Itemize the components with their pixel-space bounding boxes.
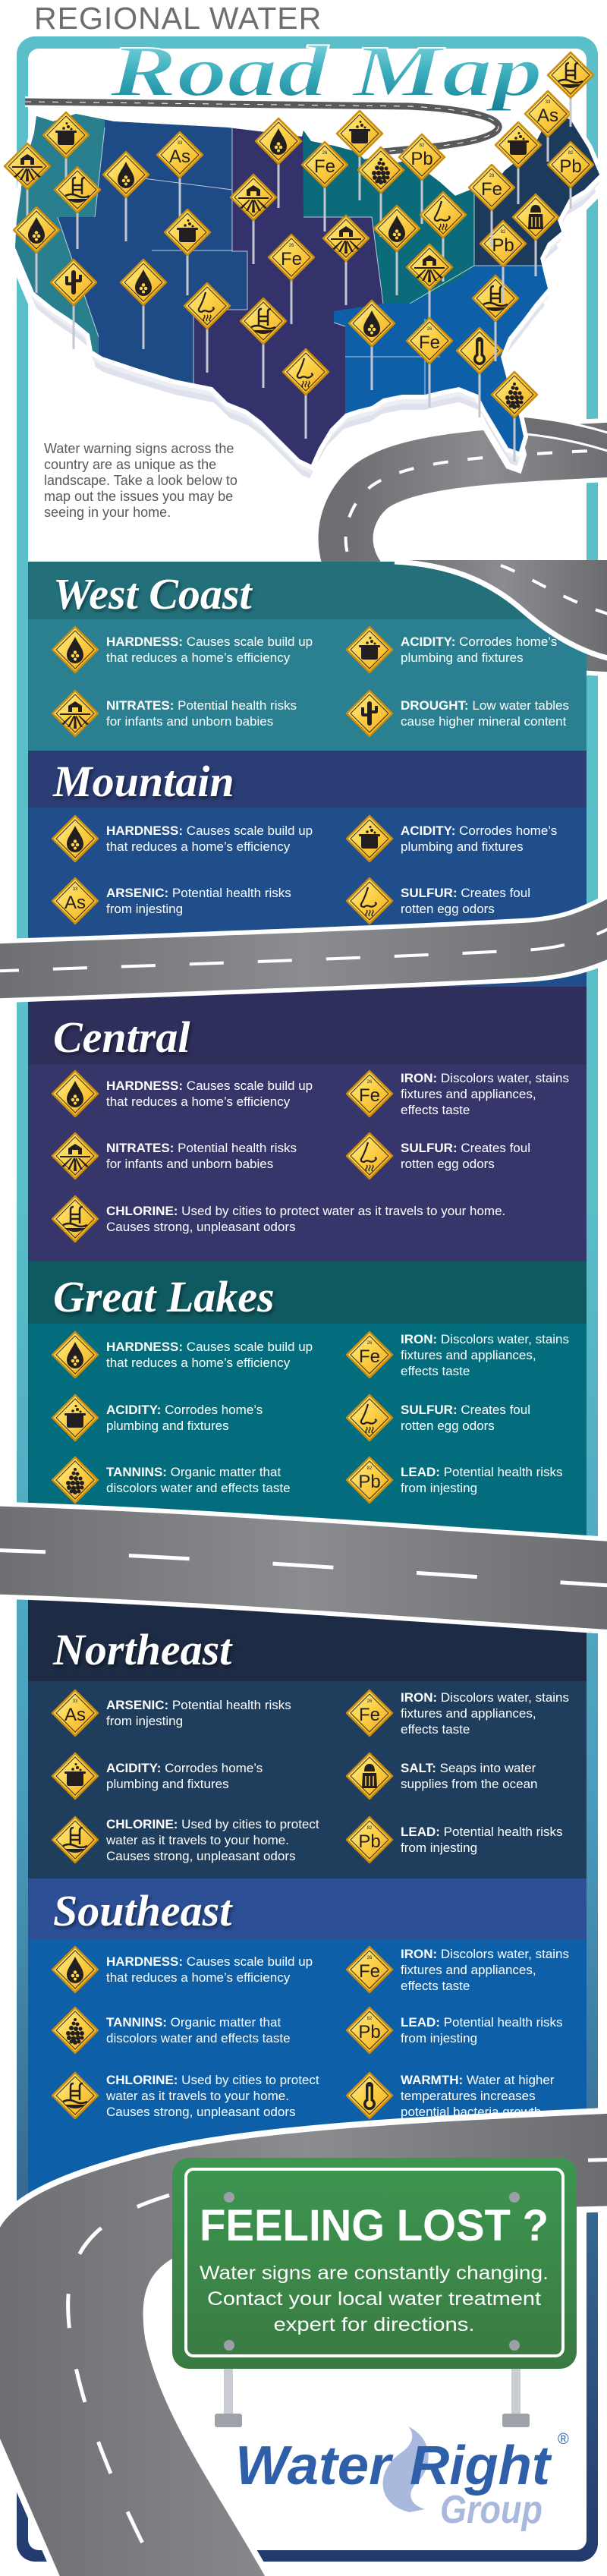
logo: water right group (235, 2426, 569, 2532)
item: tannins: discolors water and effects taste (106, 1481, 291, 1495)
item: tannins: TANNINS: Organic matter that (106, 2015, 281, 2030)
item: nitrates: for infants and unborn babies (106, 714, 273, 729)
item: chlorine: water as it travels to your home. (106, 2089, 289, 2102)
map signs: 26 (489, 174, 495, 178)
item: iron: 26 (367, 1699, 373, 1704)
item: drought: DROUGHT: Low water tables (401, 698, 569, 713)
item: chlorine (52, 1815, 319, 1864)
item: nitrates: NITRATES: Potential health risks (106, 698, 297, 713)
item: sulfur (346, 877, 530, 924)
item: iron: Fe (359, 1961, 380, 1982)
item: sulfur: rotten egg odors (401, 1419, 495, 1433)
map signs: 26 (322, 151, 328, 156)
item: nitrates (52, 1132, 297, 1179)
panel: northeast header (28, 1551, 587, 1681)
item: chlorine: Causes strong, unpleasant odors (106, 1849, 296, 1863)
road: corner over west coast (395, 560, 607, 659)
item: salt: supplies from the ocean (401, 1777, 537, 1791)
item: hardness: that reduces a home’s efficiency (106, 839, 290, 854)
item: warmth (346, 2072, 554, 2119)
item: lead: LEAD: Potential health risks (401, 2015, 563, 2030)
item: iron: IRON: Discolors water, stains (401, 1946, 569, 1961)
item: hardness: HARDNESS: Causes scale build up (106, 824, 313, 838)
item: lead: from injesting (401, 1841, 477, 1855)
item: iron: fixtures and appliances, (401, 1706, 536, 1720)
item: lead: LEAD: Potential health risks (401, 1825, 563, 1839)
item: acidity: plumbing and fixtures (401, 650, 524, 665)
item: hardness: that reduces a home’s efficiency (106, 1356, 290, 1370)
item: acidity (346, 625, 557, 674)
item: chlorine: CHLORINE: Used by cities to protect (106, 2072, 319, 2087)
item: hardness: HARDNESS: Causes scale build up (106, 1079, 313, 1093)
item: iron: fixtures and appliances, (401, 1348, 536, 1362)
item: acidity: ACIDITY: Corrodes home’s (106, 1761, 263, 1775)
item: iron: IRON: Discolors water, stains (401, 1331, 569, 1346)
callout: feeling lost sign: Contact your local water treatment (207, 2288, 541, 2310)
item: sulfur (346, 1132, 530, 1179)
road: great lakes to northeast (0, 1550, 607, 1586)
item: lead: Pb (358, 1472, 381, 1492)
item: drought: cause higher mineral content (401, 714, 566, 729)
item: iron: Fe (359, 1705, 380, 1725)
panel: mountain header: Mountain (53, 757, 234, 806)
item: chlorine (52, 2072, 319, 2119)
item: warmth: temperatures increases (401, 2089, 536, 2102)
map signs: Pb (559, 156, 582, 177)
item: hardness: HARDNESS: Causes scale build up (106, 635, 313, 649)
map signs: 33 (178, 141, 183, 146)
item: iron: Fe (359, 1346, 380, 1367)
item: iron: effects taste (401, 1978, 470, 1993)
logo: water right group: Group (440, 2488, 543, 2532)
item: hardness (52, 1331, 313, 1378)
item: sulfur (346, 1393, 530, 1442)
item: iron (346, 1331, 569, 1378)
item: chlorine: Causes strong, unpleasant odors (106, 2104, 296, 2119)
panel: west coast header: West Coast (53, 569, 252, 619)
item: iron (346, 1690, 569, 1737)
item: salt: SALT: Seaps into water (401, 1761, 536, 1775)
item: arsenic (52, 877, 291, 924)
item: sulfur: SULFUR: Creates foul (401, 1141, 530, 1155)
map signs: As (537, 105, 558, 126)
item: iron (346, 1946, 569, 1993)
item: tannins: discolors water and effects taste (106, 2031, 291, 2045)
item: iron: IRON: Discolors water, stains (401, 1070, 569, 1085)
item: tannins (52, 1456, 291, 1504)
item: sulfur: rotten egg odors (401, 1157, 495, 1171)
map signs: 82 (568, 151, 574, 156)
panel: mountain header (28, 751, 587, 808)
item: arsenic: ARSENIC: Potential health risks (106, 886, 291, 900)
item: acidity: plumbing and fixtures (401, 839, 524, 854)
item: lead (346, 2007, 563, 2054)
item: hardness (52, 1070, 313, 1117)
panel: northeast items (28, 1681, 587, 1878)
item: warmth: WARMTH: Water at higher (401, 2072, 554, 2087)
item: lead (346, 1815, 563, 1864)
map signs: 82 (501, 230, 506, 235)
item: arsenic: from injesting (106, 902, 183, 916)
intro text: Water warning signs across the country are as unique as the landscape. Take a look below to map out the issues you may be seeing in your home. (44, 441, 237, 520)
logo: water right group: Water (235, 2436, 394, 2496)
title: regional water: REGIONAL WATER (34, 1, 322, 36)
panel: great lakes header: Great Lakes (53, 1272, 275, 1321)
item: lead (346, 1456, 563, 1504)
item: lead: LEAD: Potential health risks (401, 1465, 563, 1479)
panel: southeast header: Southeast (53, 1886, 231, 1935)
item: iron: 26 (367, 1956, 373, 1960)
item: arsenic: from injesting (106, 1714, 183, 1728)
panel: southeast header (28, 1878, 587, 1939)
item: arsenic: ARSENIC: Potential health risks (106, 1698, 291, 1712)
item: iron: IRON: Discolors water, stains (401, 1690, 569, 1705)
item: sulfur: rotten egg odors (401, 902, 495, 916)
item: lead: 82 (367, 1826, 373, 1831)
panel: west coast header (28, 562, 587, 619)
item: acidity (52, 1393, 263, 1442)
road: mountain to central (0, 922, 607, 972)
panel: central header (28, 987, 587, 1064)
item: arsenic: 33 (73, 887, 78, 892)
item: arsenic: 33 (73, 1699, 78, 1704)
item: tannins: TANNINS: Organic matter that (106, 1465, 281, 1479)
item: chlorine: CHLORINE: Used by cities to protect (106, 1817, 319, 1831)
item: lead: Pb (358, 2022, 381, 2042)
item: sulfur: SULFUR: Creates foul (401, 886, 530, 900)
panel: mountain items (28, 808, 587, 987)
map signs: 82 (420, 143, 425, 148)
item: iron: Fe (359, 1085, 380, 1106)
panel: west coast items (28, 619, 587, 751)
item: acidity: plumbing and fixtures (106, 1419, 229, 1433)
road behind map (346, 425, 607, 645)
item: iron: fixtures and appliances, (401, 1963, 536, 1976)
callout: feeling lost sign: expert for directions. (273, 2314, 475, 2335)
item: hardness (52, 815, 313, 862)
item: iron (346, 1070, 569, 1117)
panel: central items (28, 1064, 587, 1261)
item: iron: effects taste (401, 1102, 470, 1117)
road: bottom curve (0, 2110, 607, 2576)
map signs: Fe (481, 179, 502, 200)
item: salt (346, 1752, 537, 1800)
item: acidity: ACIDITY: Corrodes home’s (401, 635, 557, 649)
item: arsenic: As (64, 893, 86, 913)
item: tannins (52, 2007, 291, 2054)
map signs: 26 (289, 244, 294, 248)
item: acidity: ACIDITY: Corrodes home’s (401, 824, 557, 838)
item: arsenic (52, 1690, 291, 1737)
item: lead: from injesting (401, 2031, 477, 2045)
item: chlorine: CHLORINE: Used by cities to protect water as it travels to your home. (106, 1204, 505, 1218)
panel: great lakes items (28, 1324, 587, 1551)
callout: feeling lost sign: FEELING LOST ? (200, 2201, 549, 2250)
item: hardness: that reduces a home’s efficiency (106, 1970, 290, 1985)
item: hardness: that reduces a home’s efficiency (106, 1094, 290, 1109)
item: acidity: ACIDITY: Corrodes home’s (106, 1403, 263, 1417)
item: chlorine: water as it travels to your home. (106, 1832, 289, 1847)
map signs (5, 52, 593, 461)
item: acidity: plumbing and fixtures (106, 1777, 229, 1791)
item: lead: 82 (367, 1466, 373, 1471)
map area (3, 30, 607, 675)
item: iron: fixtures and appliances, (401, 1087, 536, 1101)
item: acidity (346, 815, 557, 862)
item: lead: 82 (367, 2017, 373, 2021)
map signs: As (169, 146, 190, 167)
item: nitrates (52, 689, 297, 738)
title: road map: Road Map (109, 30, 543, 112)
item: drought (346, 689, 569, 738)
panel: southeast items (28, 1939, 587, 2201)
panel: great lakes header (28, 1261, 587, 1324)
logo: water right group: Right (410, 2436, 552, 2496)
callout: feeling lost sign: Water signs are constantly changing. (200, 2263, 549, 2284)
map signs: Fe (281, 249, 302, 269)
map signs: Pb (492, 235, 514, 256)
item: chlorine (52, 1195, 505, 1243)
item: iron: 26 (367, 1341, 373, 1346)
item: arsenic: As (64, 1705, 86, 1725)
panel: central header: Central (53, 1012, 190, 1062)
map signs: Fe (314, 156, 335, 177)
map signs: 33 (546, 100, 551, 105)
item: iron: 26 (367, 1080, 373, 1085)
item: iron: effects taste (401, 1721, 470, 1737)
US map (15, 114, 599, 478)
item: hardness: HARDNESS: Causes scale build up (106, 1340, 313, 1354)
sign posts (215, 2364, 530, 2427)
item: hardness: HARDNESS: Causes scale build up (106, 1954, 313, 1969)
item: acidity (52, 1752, 263, 1800)
item: iron: effects taste (401, 1363, 470, 1378)
item: warmth: potential bacteria growth (401, 2104, 541, 2119)
item: nitrates: for infants and unborn babies (106, 1157, 273, 1171)
map signs: Pb (410, 149, 433, 169)
item: chlorine: Causes strong, unpleasant odors (106, 1220, 296, 1234)
item: hardness (52, 1946, 313, 1993)
item: sulfur: SULFUR: Creates foul (401, 1403, 530, 1417)
map signs: Fe (419, 332, 440, 353)
item: lead: from injesting (401, 1481, 477, 1495)
top road (25, 102, 498, 152)
panel: northeast header: Northeast (53, 1625, 231, 1674)
item: lead: Pb (358, 1831, 381, 1852)
map signs: 26 (427, 327, 432, 332)
callout: feeling lost sign (172, 2158, 577, 2369)
item: hardness (52, 625, 313, 674)
item: hardness: that reduces a home’s efficiency (106, 650, 290, 665)
logo: water right group: ® (558, 2431, 569, 2448)
item: nitrates: NITRATES: Potential health risks (106, 1141, 297, 1155)
